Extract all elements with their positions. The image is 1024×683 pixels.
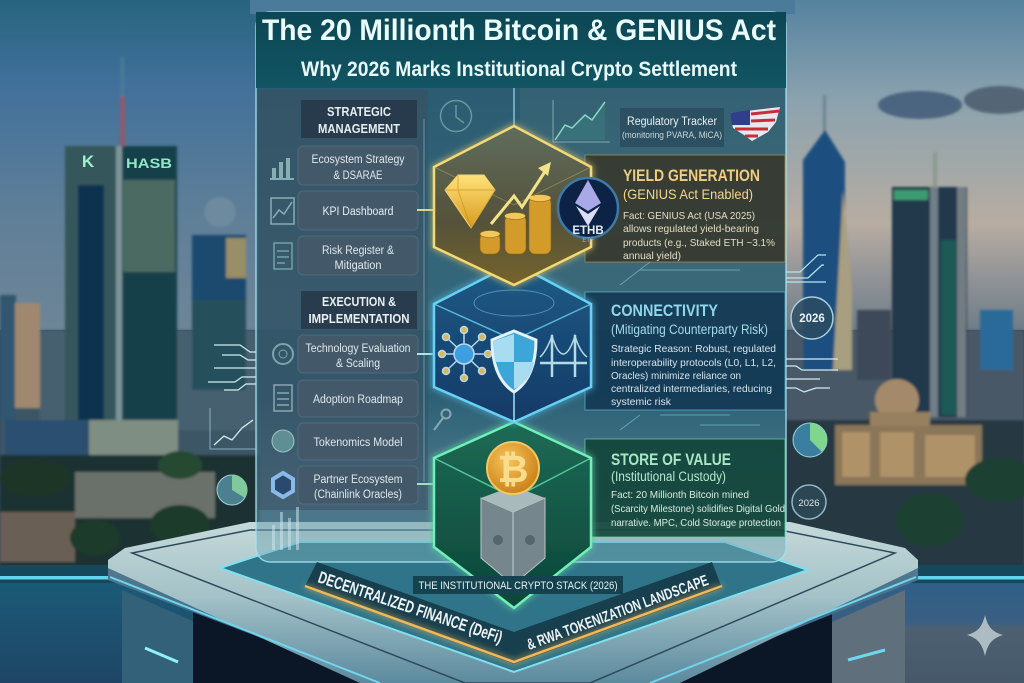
right towers [823, 95, 826, 160]
item: ecosystem strategy: Ecosystem Strategy [312, 154, 405, 166]
side badges [208, 255, 1003, 656]
text: strategic reason: systemic risk [611, 396, 672, 408]
waterfront strip [0, 565, 1024, 583]
item: partner ecosystem: Partner Ecosystem [314, 474, 402, 486]
text: fact [611, 489, 785, 529]
text: fact [623, 210, 775, 262]
text: decentralized finance: DECENTRALIZED FINANCE (DeFi) [316, 568, 505, 647]
building sign [82, 152, 172, 171]
item: tokenomics model [298, 423, 418, 460]
item: risk register: Risk Register & [322, 245, 394, 257]
icon: ETHB coin [558, 178, 618, 244]
icon: token pie [272, 430, 294, 452]
text: strategic reason: Oracles) minimize reliance on [611, 370, 741, 382]
text: fact: annual yield) [623, 250, 681, 262]
text: fact: allows regulated yield-bearing [623, 223, 759, 235]
badge: 2026: 2026 [799, 313, 825, 325]
text: strategic reason: centralized intermediaries, reducing [611, 383, 772, 395]
text: fact: products (e.g., Staked ETH ~3.1% [623, 237, 775, 249]
icon: key [434, 410, 450, 430]
text: fact: narrative. MPC, Cold Storage protection [611, 517, 781, 529]
heading: execution [301, 291, 417, 329]
item: ecosystem strategy [298, 146, 418, 185]
subtitle: Why 2026 Marks Institutional Crypto Settlement [301, 58, 737, 81]
panel: strategic management [270, 100, 418, 275]
right ground [786, 330, 1024, 430]
item: partner ecosystem [298, 466, 418, 504]
arrow: growth [491, 162, 551, 224]
icon: KPI chart [271, 198, 294, 224]
icon: diamond [445, 175, 495, 228]
icon: coins [480, 194, 551, 254]
building sign: K [82, 152, 95, 171]
badge: 2026 [791, 297, 833, 339]
left ground [0, 330, 260, 570]
icon: pie chart left [217, 475, 247, 505]
heading: execution: IMPLEMENTATION [308, 312, 410, 326]
left column backing [258, 90, 428, 510]
heading: strategic management [301, 100, 417, 138]
icon: bitcoin coin: ₿ [498, 449, 528, 491]
icon: clock [440, 100, 472, 132]
item: partner ecosystem: (Chainlink Oracles) [314, 489, 402, 501]
item: KPI dashboard [298, 191, 418, 230]
heading: strategic management: STRATEGIC [327, 105, 391, 119]
item: adoption roadmap: Adoption Roadmap [313, 394, 403, 406]
left tower [120, 95, 125, 147]
chart: sparkline [553, 100, 610, 142]
regulatory tracker: (monitoring PVARA, MiCA) [622, 130, 722, 140]
item: adoption roadmap [298, 380, 418, 417]
chart: hologram bars [272, 507, 299, 550]
icon: bitcoin coin [487, 442, 539, 494]
subheading: institutional custody: (Institutional Custody) [611, 469, 726, 484]
icon: safe [481, 486, 545, 585]
badge: 2026 lower: 2026 [798, 498, 820, 509]
regulatory tracker: Regulatory Tracker [627, 116, 717, 128]
icon: growth bars [270, 158, 294, 180]
item: technology evaluation: Technology Evaluation [306, 343, 410, 355]
item: ecosystem strategy: & DSARAE [334, 170, 383, 182]
text: fact: (Scarcity Milestone) solidifies Digital Gold [611, 503, 785, 515]
circuit: left [208, 345, 256, 390]
heading: store of value: STORE OF VALUE [611, 450, 731, 469]
second building [204, 197, 236, 227]
subheading: genius act: (GENIUS Act Enabled) [623, 186, 753, 202]
low buildings [0, 455, 260, 567]
connector lines [417, 88, 760, 484]
building sign: HASB [126, 155, 172, 171]
text: strategic reason: Strategic Reason: Robust, regulated [611, 343, 776, 355]
title band [256, 12, 786, 88]
heading: strategic management: MANAGEMENT [318, 122, 400, 136]
cube: store of value [434, 422, 591, 608]
heading: execution: EXECUTION & [322, 295, 396, 309]
text: strategic reason: interoperability protocols (L0, L1, L2, [611, 357, 776, 369]
regulatory tracker [620, 108, 724, 147]
icon: pie chart right [793, 423, 827, 457]
icon: US flag map [730, 107, 780, 141]
icon: chainlink hexagon [273, 473, 293, 497]
title: The 20 Millionth Bitcoin & GENIUS Act [262, 14, 776, 47]
item: risk register [298, 236, 418, 275]
icon: sparkle [967, 615, 1003, 656]
panel: store of value [585, 439, 785, 537]
item: risk register: Mitigation [334, 260, 382, 272]
text: strategic reason [611, 343, 776, 408]
label: institutional crypto stack [413, 576, 623, 594]
palace [835, 425, 982, 485]
item: tokenomics model: Tokenomics Model [314, 437, 402, 449]
text: fact: Fact: GENIUS Act (USA 2025) [623, 210, 755, 222]
icon: clipboard [274, 243, 292, 269]
item: KPI dashboard: KPI Dashboard [322, 206, 394, 218]
base plinth with landscape label [305, 562, 722, 664]
icon: ETHB coin: ETF [582, 238, 594, 244]
icon: roadmap clipboard [274, 385, 292, 411]
cube: connectivity [434, 263, 591, 422]
main glass panel [256, 12, 786, 562]
label: institutional crypto stack: THE INSTITUTIONAL CRYPTO STACK (2026) [418, 580, 618, 592]
chart: left sparkline [210, 408, 256, 449]
item: technology evaluation: & Scaling [336, 358, 380, 370]
circuit: right upper [786, 255, 826, 282]
icon: gear [273, 344, 293, 364]
icon: shield [492, 331, 536, 392]
text: fact: Fact: 20 Millionth Bitcoin mined [611, 489, 749, 501]
subheading: mitigating counterparty risk: (Mitigating Counterparty Risk) [611, 322, 768, 337]
panel: execution and implementation [272, 291, 418, 504]
heading: connectivity: CONNECTIVITY [611, 301, 719, 320]
icon: bridge [540, 335, 587, 377]
heading: yield generation: YIELD GENERATION [623, 166, 760, 185]
platform [108, 522, 918, 683]
badge: 2026 lower [792, 485, 826, 519]
text: RWA tokenization landscape: & RWA TOKENIZATION LANDSCAPE [525, 572, 711, 654]
panel: yield generation [585, 155, 785, 262]
item: technology evaluation [298, 335, 418, 373]
circuit: right lower [786, 359, 838, 392]
panel: connectivity [585, 292, 785, 410]
cube: yield generation [434, 126, 618, 285]
icon: network [438, 326, 492, 382]
icon: ETHB coin: ETHB [572, 225, 604, 237]
